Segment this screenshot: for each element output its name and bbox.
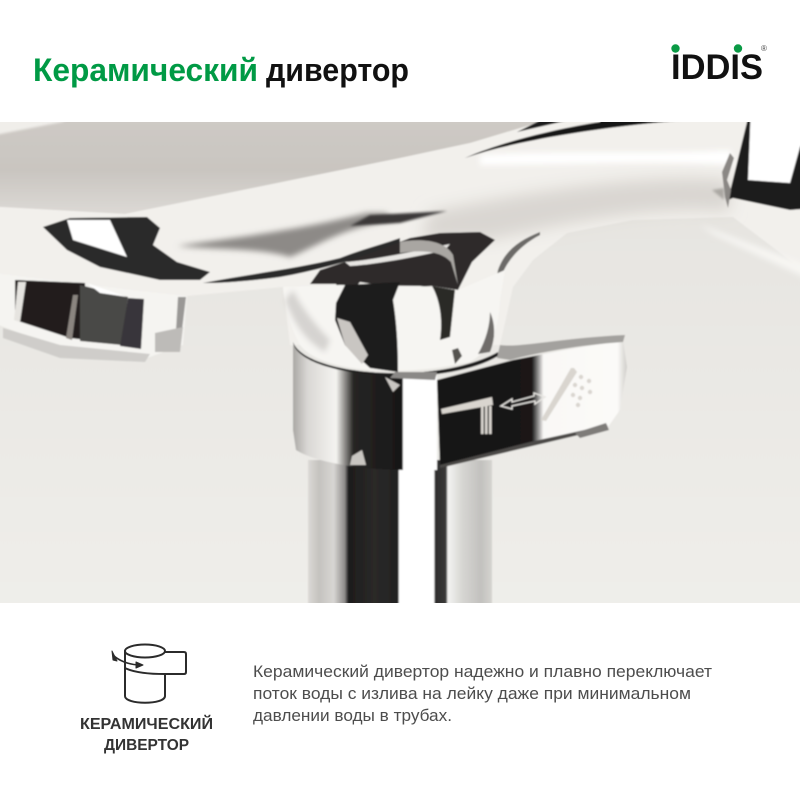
caption label: ДИВЕРТОР xyxy=(104,737,189,754)
description text: Керамический дивертор надежно и плавно переключает xyxy=(253,663,712,681)
brand logo: IDDIS xyxy=(671,48,763,87)
brand logo: ® xyxy=(761,44,767,53)
top highlights on spout xyxy=(466,122,674,158)
handle icon: double arrow xyxy=(501,393,545,409)
pipe xyxy=(308,460,492,620)
collar ring xyxy=(293,342,498,376)
title: дивертор xyxy=(266,52,409,88)
handle icon: spout xyxy=(441,397,493,434)
caption label xyxy=(80,715,213,754)
caption icon: ceramic diverter xyxy=(112,644,186,703)
collar body xyxy=(293,345,437,470)
diverter handle xyxy=(437,335,627,468)
caption label: КЕРАМИЧЕСКИЙ xyxy=(80,715,213,733)
shelf shadow area xyxy=(0,122,538,214)
product photo: chrome faucet diverter xyxy=(0,105,800,620)
description text: давлении воды в трубах. xyxy=(253,707,452,725)
description text xyxy=(253,663,712,725)
curved arm highlight xyxy=(496,232,541,274)
spout dark reflection xyxy=(43,217,210,280)
description text: поток воды с излива на лейку даже при минимальном xyxy=(253,685,691,703)
aerator xyxy=(0,272,187,358)
title: Керамический xyxy=(33,52,258,88)
spout streak reflections xyxy=(177,211,495,300)
title xyxy=(33,52,409,88)
dome white window and dark band xyxy=(432,286,455,340)
handle icon: shower xyxy=(541,368,592,421)
photo background wall xyxy=(0,216,800,603)
upper dome xyxy=(283,270,505,371)
right chrome junction xyxy=(728,122,800,211)
spout body xyxy=(0,105,800,345)
